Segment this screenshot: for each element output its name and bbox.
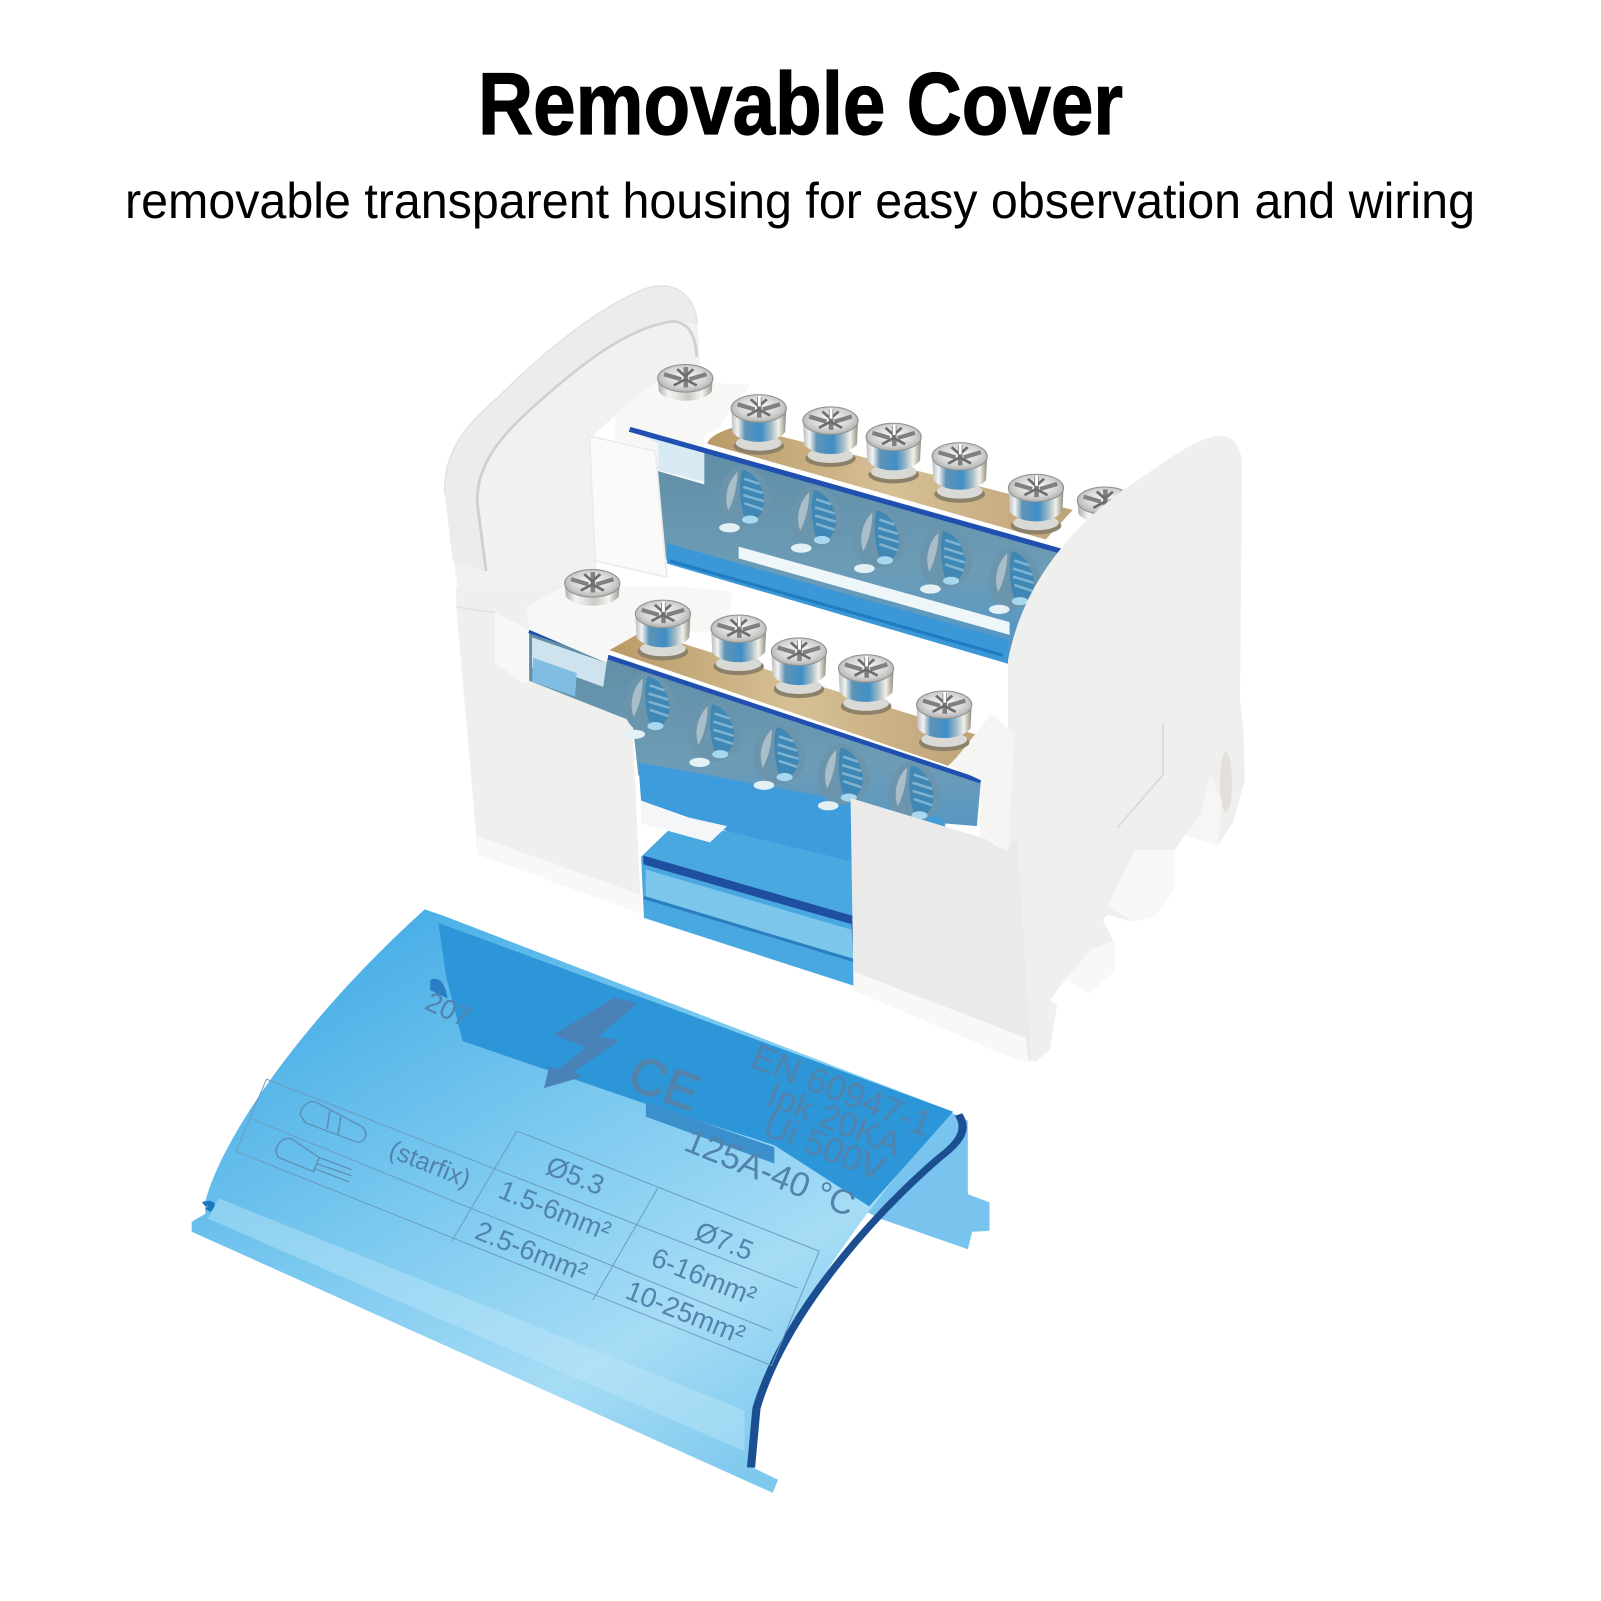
cover markings: Ø7.5: [691, 1215, 758, 1266]
rear flap: [438, 923, 990, 1249]
cover markings: CE: [621, 1044, 708, 1122]
back left end cap: [445, 286, 701, 630]
darker inner band: [438, 923, 953, 1206]
cover markings: 2.5-6mm²: [471, 1215, 592, 1288]
back brass bar: [707, 426, 1073, 539]
subtitle: removable transparent housing for easy observation and wiring: [125, 173, 1475, 229]
band notch: [430, 979, 448, 998]
front row screws: [565, 570, 972, 751]
left edge highlight: [204, 1203, 211, 1210]
cover markings: 1.5-6mm²: [494, 1174, 615, 1247]
cover markings: [385, 986, 938, 1350]
crimp ferrule icon: [300, 1102, 366, 1142]
back translucent corner: [630, 429, 704, 482]
distribution terminal block: [445, 286, 1245, 1062]
wire strand icon: [276, 1138, 352, 1182]
cover markings: 6-16mm²: [647, 1242, 761, 1312]
cover markings: Ui 500V: [758, 1104, 891, 1189]
removable transparent cover: [192, 909, 990, 1493]
cover markings: EN 60947-1: [746, 1036, 938, 1145]
right front body: [851, 798, 1031, 1061]
dark sticker patch: [646, 1102, 774, 1164]
lower rim highlight: [208, 1198, 745, 1451]
spec table grid: [236, 1079, 819, 1366]
lightning arrow symbol: [544, 998, 637, 1088]
cover markings: Ø5.3: [542, 1150, 609, 1201]
right body base strip: [853, 971, 1029, 1062]
cover markings: 10-25mm²: [622, 1274, 750, 1350]
cover markings: (starfix): [385, 1136, 474, 1194]
din rail shadows: [1065, 723, 1232, 993]
right end cap with din feet: [850, 436, 1245, 1062]
cover front surface: [192, 909, 953, 1493]
lower blue cover section: [641, 801, 857, 987]
back rail: [630, 428, 1063, 664]
dark cover edge: [751, 1115, 963, 1468]
front white block: [526, 586, 733, 663]
cover markings: 125A-40 °C: [679, 1122, 860, 1224]
back blue edge: [630, 429, 1063, 552]
front right white block: [950, 714, 1014, 852]
front brass bar: [610, 630, 979, 766]
back row screws: [658, 365, 1132, 534]
cover markings: 207: [421, 986, 476, 1033]
title: Removable Cover: [478, 54, 1123, 153]
front rail: [529, 630, 981, 872]
cover markings: Ipk 20KA: [762, 1076, 907, 1164]
back white block: [615, 380, 750, 484]
front left body: [456, 586, 641, 914]
back white tab: [589, 436, 667, 577]
